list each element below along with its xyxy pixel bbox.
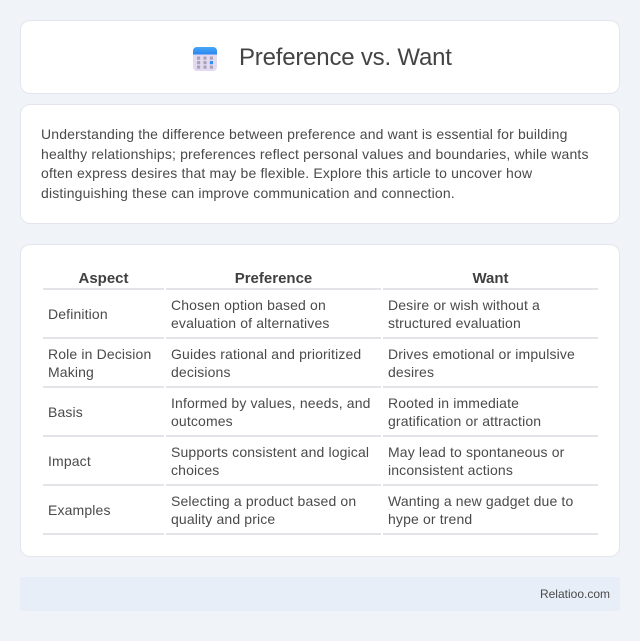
row: role in decision making [43,346,598,388]
footer bar [20,577,620,611]
intro text [41,126,589,201]
header panel [20,20,620,94]
row: impact: Impact [48,453,91,469]
intro text: often express desires that may be flexible. Explore this article to uncover how [41,165,532,181]
row: examples: Wanting a new gadget due to [388,493,573,509]
intro text: healthy relationships; preferences reflect personal values and boundaries, while wants [41,146,589,162]
comparison table [43,270,598,535]
row: impact: May lead to spontaneous or [388,444,564,460]
row: examples [43,493,598,535]
row: basis: Informed by values, needs, and [171,395,371,411]
row: impact [43,444,598,486]
row: basis [43,395,598,437]
row: role in decision making: Making [48,364,94,380]
footer credit: Relatioo.com [540,587,610,601]
intro text: distinguishing these can improve communication and connection. [41,184,455,200]
row: definition: Desire or wish without a [388,297,540,313]
row: role in decision making: Guides rational and prioritized [171,346,361,362]
row: basis: Rooted in immediate [388,395,519,411]
intro text: Understanding the difference between preference and want is essential for building [41,126,568,142]
row: impact: Supports consistent and logical [171,444,369,460]
row: role in decision making: desires [388,364,434,380]
column headings [43,270,598,290]
row: role in decision making: Role in Decision [48,346,151,362]
row: basis: outcomes [171,413,233,429]
row: definition [43,297,598,339]
table panel [20,244,620,557]
row: impact: choices [171,462,219,478]
row: role in decision making: decisions [171,364,231,380]
column headings: Preference [235,270,312,287]
row: basis: gratification or attraction [388,413,541,429]
row: role in decision making: Drives emotional or impulsive [388,346,575,362]
title: Preference vs. Want [239,44,452,71]
row: impact: inconsistent actions [388,462,513,478]
row: basis: Basis [48,404,83,420]
row: definition: structured evaluation [388,315,521,331]
column headings: Want [472,270,509,287]
row: examples: quality and price [171,511,275,527]
row: definition: Definition [48,306,108,322]
row: definition: Chosen option based on [171,297,326,313]
column headings: Aspect [78,270,129,287]
row: definition: evaluation of alternatives [171,315,330,331]
row: examples: hype or trend [388,511,472,527]
row: examples: Examples [48,502,111,518]
icon: calendar [193,47,217,71]
row: examples: Selecting a product based on [171,493,356,509]
intro panel [20,104,620,224]
